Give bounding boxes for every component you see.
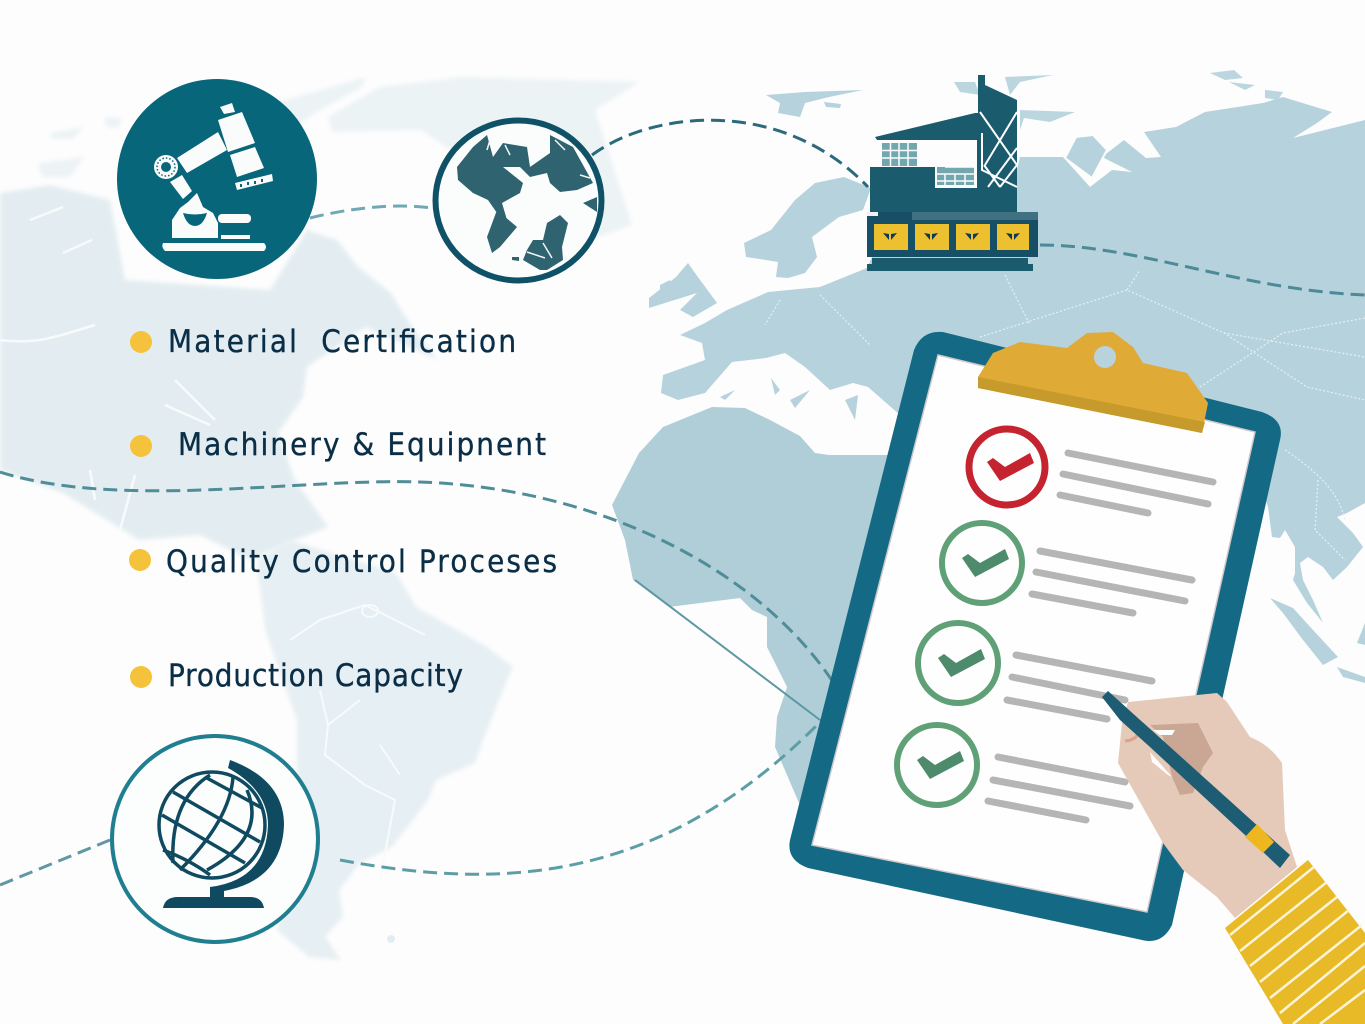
south america: [258, 540, 513, 960]
sumatra, java, borneo: [1270, 598, 1365, 683]
pen: [1102, 691, 1290, 868]
hand holding pen: [1102, 691, 1365, 1024]
paper sheet: [812, 355, 1255, 912]
bullet item: production capacity: Production Capacity: [168, 658, 463, 694]
arctic islands: [954, 70, 1283, 130]
check item 2: [942, 523, 1192, 613]
north america white lakes and rivers: [0, 207, 215, 530]
bullet item: machinery and equipment: Machinery & Equipnent: [178, 427, 546, 463]
south america rivers: [290, 605, 425, 880]
icon: earth globe: [436, 120, 602, 280]
route lines: [0, 120, 1365, 885]
icon: robot arm: [117, 79, 317, 279]
gaps between fingers: [1150, 730, 1175, 777]
bullet item: material certification: Material Certification: [168, 324, 516, 360]
bullet list: [129, 324, 557, 694]
bullet item: quality control: Quality Control Proceses: [166, 544, 557, 580]
icon: desk globe: [112, 736, 318, 942]
kola peninsula: [1065, 135, 1107, 178]
north america main: [0, 185, 438, 560]
mediterranean details: [720, 378, 858, 420]
hand: [1118, 693, 1297, 918]
africa: [612, 407, 900, 810]
sleeve: [1225, 860, 1365, 1024]
dotted borders: [765, 270, 1365, 560]
thumbnail: [1125, 725, 1140, 741]
check item 3: [918, 623, 1152, 719]
pacific islet: [387, 935, 395, 943]
eurasia main: [661, 97, 1365, 623]
clip: [978, 332, 1208, 433]
arctic north america: [38, 77, 640, 240]
greenland style island: [766, 90, 863, 117]
united kingdom and ireland: [649, 263, 717, 317]
scandinavia: [744, 177, 871, 278]
check item 4: [897, 725, 1130, 820]
clipboard: [789, 332, 1281, 941]
clipboard board: [789, 332, 1281, 941]
check item 1: [969, 429, 1213, 513]
fingers shadow: [1150, 723, 1213, 795]
pen band: [1245, 824, 1274, 853]
icon: factory: [867, 75, 1038, 271]
